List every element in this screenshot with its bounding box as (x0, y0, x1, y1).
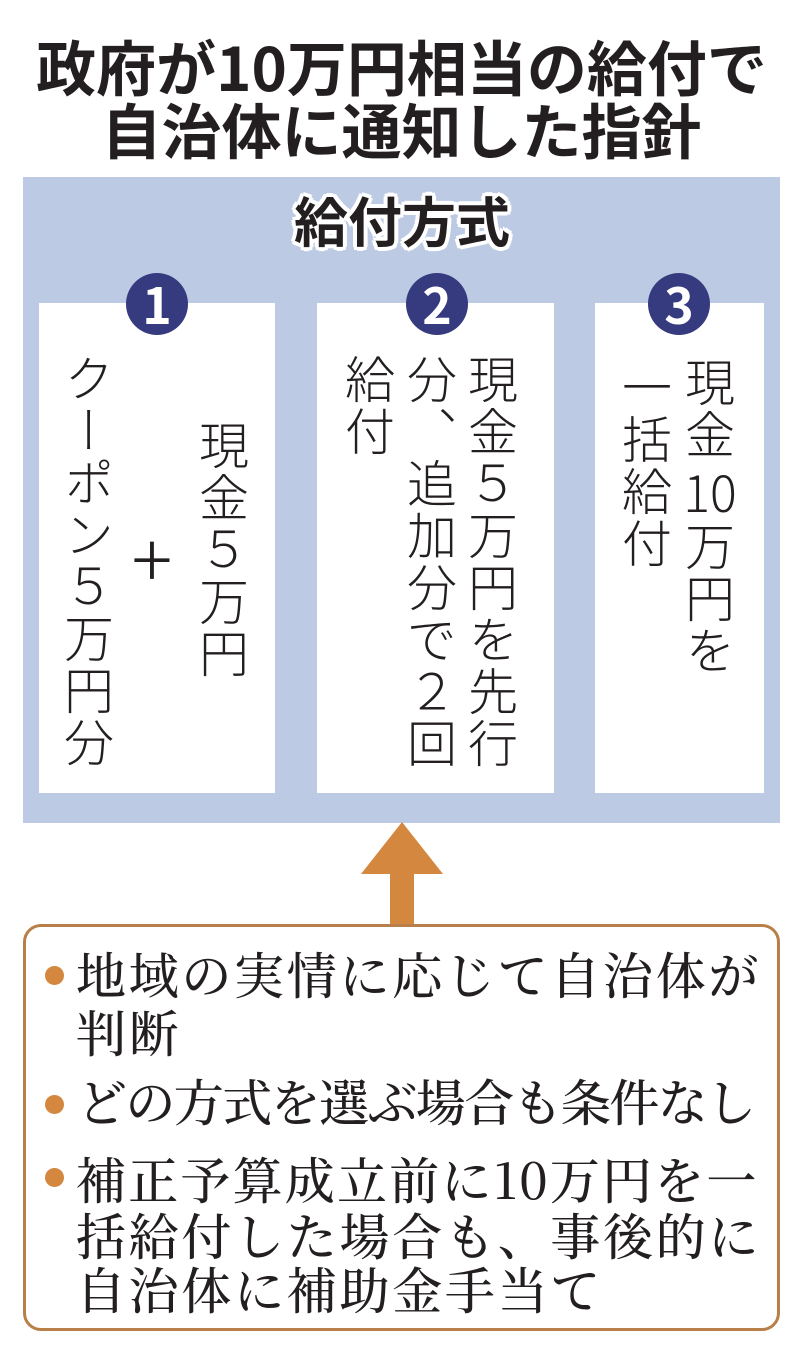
note 2: どの方式を選ぶ場合も条件なし (77, 1064, 755, 1136)
title: 自治体に通知した指針 (102, 85, 702, 172)
note 3: 自治体に補助金手当て (76, 1252, 603, 1324)
option 3 text line 1: 現金 10 万円を (674, 357, 746, 677)
note 3: 補正予算成立前に10万円を一 (76, 1142, 759, 1214)
panel: payment methods (23, 177, 780, 823)
option 2 text line 2: 分、追加分で２回 (396, 354, 468, 770)
option 1 text: cash: 現金５万円 (188, 420, 260, 680)
option 2 text line 1: 現金５万円を先行 (457, 354, 529, 770)
panel: notes (23, 924, 780, 1331)
number badge 1 (126, 273, 188, 335)
bullet 2 (45, 1095, 64, 1114)
title (36, 22, 767, 172)
note 1 (76, 937, 761, 1067)
note 3 (76, 1142, 761, 1324)
option 3 text line 2: 一括給付 (611, 362, 683, 570)
note 3: 括給付した場合も、事後的に (76, 1198, 761, 1270)
option 1 text: coupon: クーポン５万円分 (53, 353, 125, 769)
option 2 text line 3: 給付 (334, 354, 406, 458)
option 1 plus sign: + (132, 500, 172, 610)
number badge 3: 3 (664, 267, 694, 339)
heading: payment methods: 給付方式 (294, 179, 510, 258)
card: option 3 (595, 303, 764, 793)
card: option 2 (317, 303, 554, 793)
number badge 2 (406, 273, 468, 335)
arrow (361, 822, 443, 924)
number badge 1: 1 (142, 267, 172, 339)
bullet 3 (45, 1168, 64, 1187)
number badge 2: 2 (422, 267, 452, 339)
note 1: 地域の実情に応じて自治体が (76, 937, 761, 1009)
bullet 1 (45, 966, 64, 985)
card: option 1 (39, 303, 275, 793)
title: 政府が10万円相当の給付で (36, 22, 767, 109)
note 1: 判断 (76, 995, 181, 1067)
number badge 3 (648, 273, 710, 335)
